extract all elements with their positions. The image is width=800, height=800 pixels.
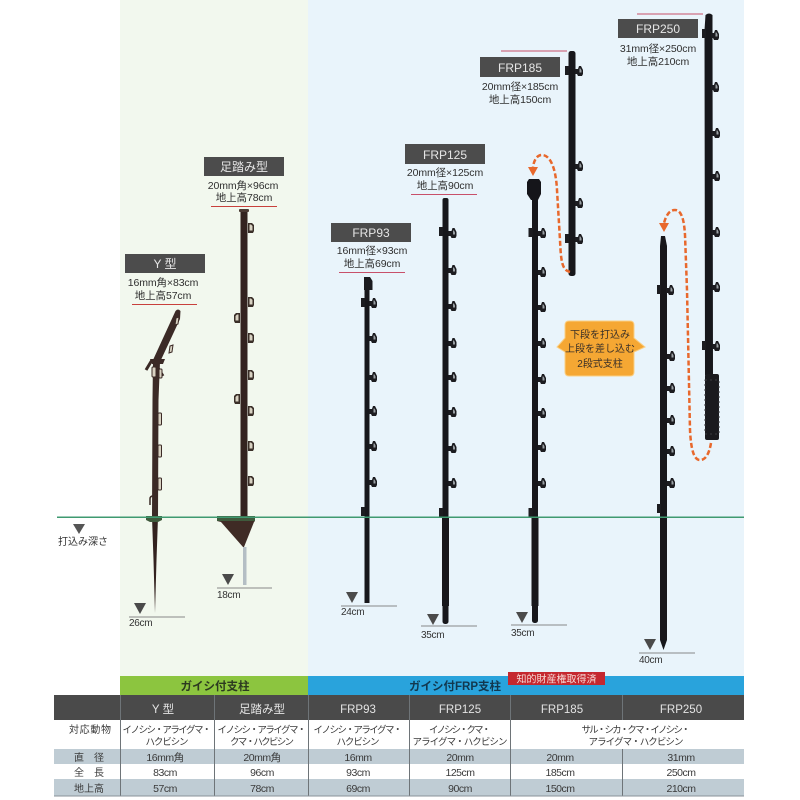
post FRP250 upper section [702, 14, 720, 440]
spec table: 20mm角 [243, 751, 281, 764]
label: FRP250 [618, 14, 703, 68]
spec table: FRP250 [660, 704, 702, 716]
driving depth legend [58, 524, 108, 548]
spec table: 地上高 [74, 782, 104, 795]
label: Y-type [125, 254, 205, 305]
depth marker: 35cm FRP125 [421, 614, 477, 641]
spec table: FRP125 [439, 704, 481, 716]
spec table: 対応動物 [69, 723, 111, 736]
spec table: 150cm [545, 783, 575, 795]
footstep-type post [217, 209, 255, 585]
table band: insulator posts [120, 676, 308, 695]
depth marker: 18cm: 18cm [217, 590, 240, 601]
spec table: Y 型 [152, 702, 174, 716]
spec table: サル・シカ・クマ・イノシシ・ [582, 725, 690, 736]
depth marker: 18cm [217, 574, 272, 601]
callout: two-stage post: 上段を差し込む [565, 342, 635, 355]
spec table: アライグマ・ハクビシン [588, 736, 684, 748]
arrow: insert FRP250 [659, 210, 711, 460]
spec table: イノシシ・アライグマ・ [314, 724, 402, 736]
panel: blue background for FRP posts [308, 0, 744, 676]
spec table: 57cm [153, 783, 178, 795]
Y-type post [146, 310, 180, 613]
label: FRP185: 20mm径×185cm [482, 80, 558, 93]
depth marker: 24cm: 24cm [341, 607, 364, 618]
depth marker: 26cm [129, 603, 185, 629]
post FRP185 lower section [527, 179, 546, 623]
spec table: 直 径 [74, 751, 104, 764]
spec table: 全 長 [74, 766, 104, 779]
label: FRP185: FRP185 [498, 61, 542, 75]
label: Y-type: 16mm角×83cm [128, 276, 199, 289]
spec table: 93cm [346, 767, 371, 779]
label: footstep-type: 20mm角×96cm [208, 179, 279, 192]
spec table: イノシシ・アライグマ・ [122, 724, 212, 736]
label: FRP185 [480, 50, 567, 106]
spec table: 16mm角 [146, 751, 184, 764]
spec table: 20mm [546, 752, 574, 764]
callout: two-stage post [557, 321, 645, 376]
label: footstep-type: 地上高78cm [216, 191, 273, 204]
arrow: insert FRP185 [528, 155, 570, 272]
spec table: 69cm [346, 783, 371, 795]
spec table: 足踏み型 [239, 702, 285, 716]
spec table: 83cm [153, 767, 178, 779]
label: FRP125: 地上高90cm [417, 179, 474, 192]
panel: green background for insulator posts [120, 0, 308, 676]
label: FRP125: FRP125 [423, 148, 467, 162]
post FRP125 [439, 198, 456, 624]
spec table: 78cm [250, 783, 275, 795]
spec table: ハクビシン [336, 737, 380, 748]
spec table: 90cm [448, 783, 473, 795]
spec table: 250cm [666, 767, 696, 779]
spec table: ハクビシン [146, 737, 188, 748]
label: FRP125: 20mm径×125cm [407, 166, 483, 179]
label: FRP250: 地上高210cm [627, 55, 689, 68]
spec table: 210cm [666, 783, 696, 795]
depth marker: 40cm: 40cm [639, 655, 662, 666]
table band: insulator FRP posts [308, 676, 744, 695]
spec table: 20mm [446, 752, 474, 764]
badge: IP acquired: 知的財産権取得済 [516, 672, 596, 686]
spec table: イノシシ・アライグマ・ [218, 724, 306, 736]
label: FRP250: 31mm径×250cm [620, 42, 696, 55]
depth marker: 26cm: 26cm [129, 618, 152, 629]
spec table: FRP93 [340, 704, 376, 716]
depth marker: 35cm FRP185 [511, 612, 567, 639]
spec table [54, 695, 744, 796]
ground line [57, 516, 744, 518]
post FRP250 lower section [657, 236, 675, 650]
badge: IP acquired [508, 672, 605, 686]
depth marker: 24cm [341, 592, 397, 618]
label: FRP125 [405, 144, 485, 195]
spec table: 96cm [250, 767, 275, 779]
label: Y-type: 地上高57cm [135, 289, 192, 302]
spec table: イノシシ・クマ・ [429, 725, 491, 736]
table band: insulator posts: ガイシ付支柱 [180, 679, 250, 693]
callout: two-stage post: 2段式支柱 [577, 357, 623, 370]
label: footstep-type: 足踏み型 [220, 160, 268, 174]
label: FRP185: 地上高150cm [489, 93, 551, 106]
depth marker: 35cm FRP125: 35cm [421, 630, 444, 641]
callout: two-stage post: 下段を打込み [570, 328, 630, 341]
spec table: FRP185 [541, 704, 583, 716]
spec table: 125cm [445, 767, 475, 779]
spec table: アライグマ・ハクビシン [412, 736, 508, 748]
spec table: 16mm [344, 752, 372, 764]
driving depth legend: 打込み深さ [58, 535, 108, 548]
label: FRP250: FRP250 [636, 22, 680, 36]
label: FRP93: FRP93 [352, 226, 390, 240]
table band: insulator FRP posts: ガイシ付FRP支柱 [409, 679, 501, 693]
depth marker: 35cm FRP185: 35cm [511, 628, 534, 639]
spec table: クマ・ハクビシン [230, 737, 294, 748]
label: FRP93: 16mm径×93cm [337, 244, 408, 257]
post FRP93 [361, 277, 377, 603]
label: footstep-type [204, 157, 284, 207]
spec table: 185cm [545, 767, 575, 779]
label: FRP93: 地上高69cm [344, 257, 401, 270]
label: FRP93 [331, 223, 411, 273]
label: Y-type: Y 型 [153, 257, 177, 271]
post FRP185 upper section [565, 51, 583, 276]
depth marker: 40cm [639, 639, 695, 666]
spec table: 31mm [667, 752, 695, 764]
